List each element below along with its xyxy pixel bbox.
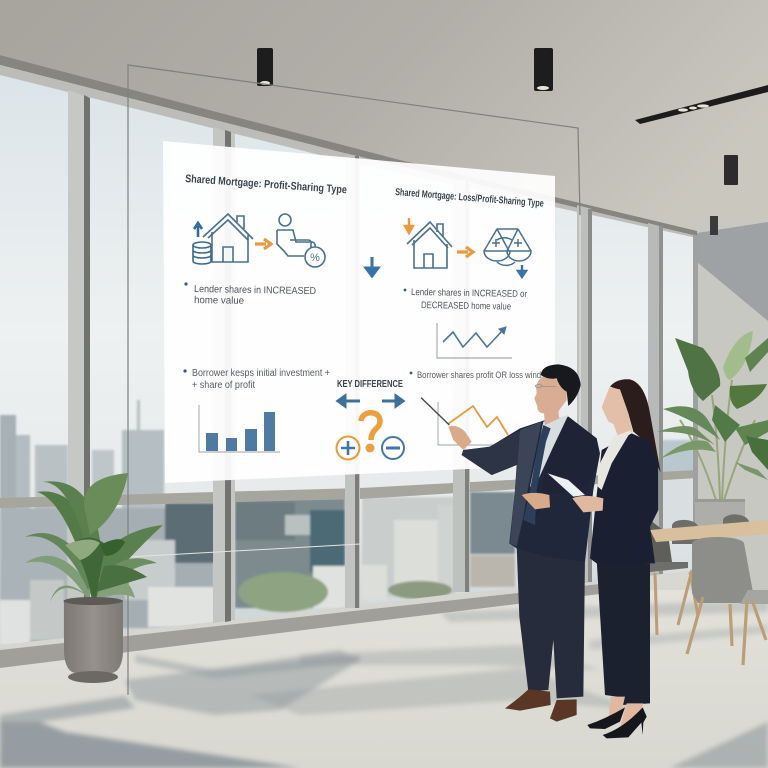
ceiling light: centre spot (534, 48, 553, 91)
text: borrower left (183, 368, 330, 391)
chart: orange line (438, 402, 508, 445)
glass panel outline (128, 65, 580, 695)
ceiling light: right spot (724, 155, 738, 185)
panel: projected screen (163, 141, 555, 483)
chart: blue line (437, 323, 512, 358)
chart: bar chart (199, 405, 280, 452)
text: borrower left: + share of profit (192, 380, 255, 391)
heading: profit-sharing type: Shared Mortgage: Profit-Sharing Type (185, 173, 347, 196)
arrow: orange right (457, 247, 473, 257)
floor (0, 590, 768, 768)
ceiling light: far spot (710, 216, 718, 235)
icon: orange down arrow (405, 218, 413, 233)
people: presenter and colleague (421, 364, 661, 738)
text: lender right (404, 287, 527, 313)
text: lender left (184, 282, 316, 307)
ceiling (0, 0, 768, 233)
arrow: small blue down (518, 265, 526, 277)
icon: house left (203, 214, 253, 262)
plant: left potted (25, 473, 163, 683)
furniture: dining table and chairs (650, 514, 768, 665)
right wall (697, 222, 768, 592)
icon: plus circle (336, 436, 360, 460)
icon: house right (407, 222, 452, 268)
ceiling light: left spot (257, 48, 273, 86)
heading: loss/profit-sharing type: Shared Mortgage: Loss/Profit-Sharing Type (395, 187, 544, 210)
text: lender left: home value (194, 295, 245, 307)
ceiling light: linear track (635, 85, 768, 124)
icon: question mark (361, 413, 380, 452)
icon: balance scale (484, 229, 531, 265)
arrow: right blue (382, 396, 403, 406)
icon: coins with up arrow (193, 223, 211, 264)
text: borrower left: Borrower kesps initial investment + (192, 368, 330, 379)
man (421, 364, 600, 722)
arrow: orange left (255, 239, 271, 249)
icon: minus circle (382, 437, 404, 459)
plant: right potted (657, 331, 768, 527)
text: lender right: Lender shares in INCREASED or (411, 287, 527, 300)
arrow: centre blue down (366, 257, 378, 276)
icon: person with percent: % (310, 252, 320, 264)
arrow: left blue (338, 396, 360, 406)
text: lender right: DECREASED home value (421, 300, 511, 313)
text: lender left: Lender shares in INCREASED (194, 284, 316, 297)
window view: sky and city (0, 70, 700, 650)
window frame (0, 55, 698, 668)
heading: key difference: KEY DIFFERENCE (337, 379, 403, 390)
woman (548, 379, 661, 738)
icon: person with percent (277, 214, 325, 267)
text: borrower right: Borrower shares profit OR loss winds (417, 370, 545, 381)
